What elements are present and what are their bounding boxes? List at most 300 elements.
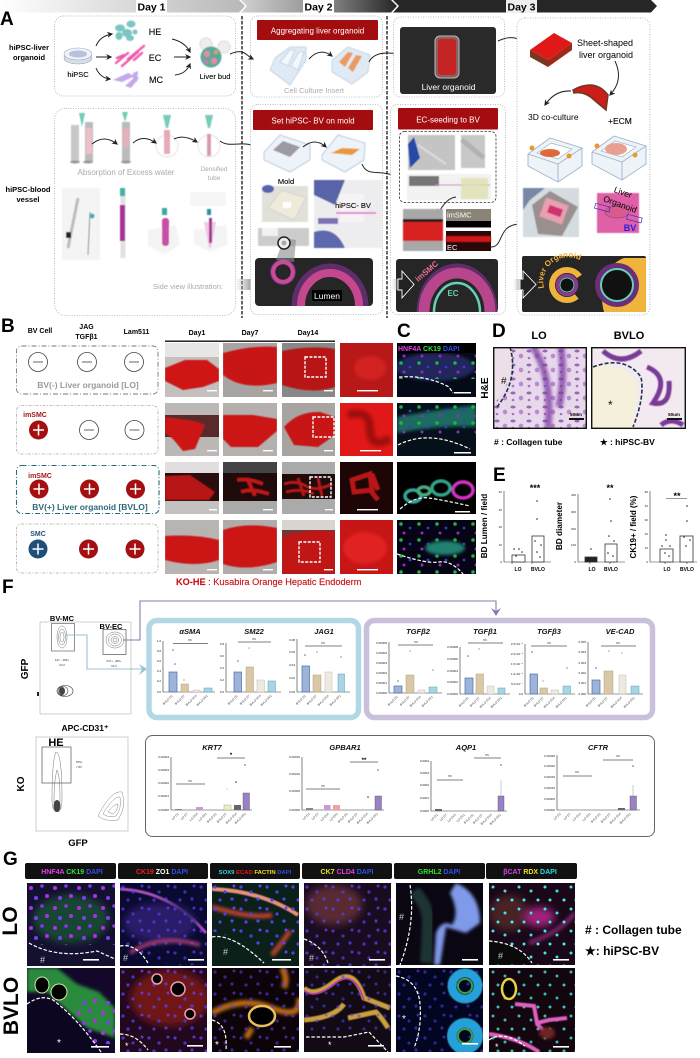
chart GPBAR1: LO D7 xyxy=(311,812,320,821)
column headers: TGFβ1 xyxy=(75,334,98,341)
LO H and E image: 50um xyxy=(570,412,582,417)
chart KRT7: ns xyxy=(188,779,192,783)
label mold: Mold xyxy=(278,177,294,186)
panel D xyxy=(480,321,686,447)
chart CFTR: 0.00000 xyxy=(544,808,555,812)
chart BD diameter xyxy=(555,483,625,573)
arrow to seeded photo xyxy=(438,197,456,214)
day timeline arrow: Day 1 xyxy=(137,2,166,14)
chart BD lumen: 0 xyxy=(500,560,502,564)
seeded tube photo xyxy=(403,209,443,251)
label 3D co-culture: 3D co-culture xyxy=(528,112,579,122)
chart KRT7: BVLO D7 xyxy=(216,812,228,824)
chart AQP1 xyxy=(420,743,507,826)
chart KRT7: LO D14 xyxy=(189,812,199,822)
image row 1: HNF4A CK19 DAPI xyxy=(398,346,460,353)
micrograph BVLO 4: * xyxy=(328,1040,332,1050)
chart AQP1: LO D7 xyxy=(439,813,448,822)
chart CK19 xyxy=(629,490,697,573)
photo imSMC day 1 xyxy=(165,403,219,456)
chart JAG1: BVLO D1 xyxy=(295,694,307,706)
LO H and E image: # xyxy=(501,376,507,387)
chart VE-CAD: BVLO D21 xyxy=(623,696,636,709)
chart VE-CAD xyxy=(578,627,643,709)
syringes diagram xyxy=(70,112,220,164)
chart GPBAR1: BVLO D7 xyxy=(347,812,359,824)
imSMC EC illustration xyxy=(396,259,498,312)
chart VE-CAD: ns xyxy=(616,641,620,645)
chart GPBAR1: 0.00010 xyxy=(289,772,300,776)
chart KRT7: LO D7 xyxy=(180,812,189,821)
box aggregating liver organoid xyxy=(230,16,398,97)
chart TGFb1: 0.00004 xyxy=(447,669,458,673)
chart aSMA: ns xyxy=(188,638,192,642)
stain header 3: SOX9 ECAD FACTIN DAPI xyxy=(219,870,292,876)
process arrows xyxy=(92,137,263,152)
arrow into coculture illustration xyxy=(512,271,536,298)
chart TGFb1: BVLO D7 xyxy=(469,696,481,708)
arrow between molds xyxy=(303,142,326,147)
liver organoid vessel illustration xyxy=(522,252,646,312)
chart AQP1: LO D14 xyxy=(447,813,457,823)
micrograph BVLO 1 xyxy=(27,968,115,1053)
chart aSMA: 0.0 xyxy=(157,690,161,694)
chart TGFb2: BVLO D7 xyxy=(399,695,411,707)
chart CFTR: 0.00020 xyxy=(544,764,555,768)
day timeline arrow: Day 3 xyxy=(507,2,536,14)
micrograph BVLO 2 xyxy=(120,968,207,1052)
chart VE-CAD: 0.003 xyxy=(578,661,586,665)
chart JAG1: 0.00 xyxy=(289,690,295,694)
chart SM22 xyxy=(220,627,281,707)
chart JAG1: 0.04 xyxy=(289,663,295,667)
legend collagen tube: # : Collagen tube xyxy=(494,437,563,447)
header BVLO: BVLO xyxy=(614,330,645,342)
label cell culture insert: Cell Culture Insert xyxy=(284,86,345,95)
chart TGFb3: BVLO D21 xyxy=(555,696,568,709)
coculture photo xyxy=(523,188,579,237)
chart TGFb3: 2.0×10⁻⁶ xyxy=(511,652,524,656)
chart CFTR: LO D21 xyxy=(582,812,592,822)
sheet-shaped organoid icon xyxy=(530,33,572,67)
imSMC EC illustration: imSMC xyxy=(414,259,440,284)
condition box LO: BV(-) Liver organoid [LO] xyxy=(37,380,139,390)
photo imSMC day 14 xyxy=(282,403,335,456)
red heading xyxy=(398,108,498,130)
chart CK19: LO xyxy=(664,567,671,573)
chart VE-CAD: BVLO D7 xyxy=(597,696,609,708)
condition box SMC xyxy=(16,524,158,573)
stain header 4 xyxy=(302,863,392,879)
flow plot BV: 20.0 xyxy=(59,663,65,667)
chart AQP1: ns xyxy=(485,753,489,757)
flow plot HE: HE xyxy=(48,737,64,749)
chart BD lumen: 20 xyxy=(499,525,502,529)
micrograph BVLO 3 xyxy=(212,968,299,1052)
chart AQP1: ns xyxy=(448,774,452,778)
legend collagen tube: # : Collagen tube xyxy=(585,923,682,937)
flow plot HE: 555+ xyxy=(76,760,83,764)
chart GPBAR1: BVLO D14 xyxy=(356,812,369,825)
photo LO zoom xyxy=(340,343,393,397)
column headers: BV Cell xyxy=(28,328,52,335)
chart BD diameter: 200 xyxy=(571,527,576,531)
chart BD lumen: 10 xyxy=(499,543,502,547)
chart BD diameter: BVLO xyxy=(604,567,618,573)
chart aSMA xyxy=(157,627,215,707)
chart CK19: 20 xyxy=(645,532,648,536)
flow plot axis labels: GFP xyxy=(20,658,31,679)
arrow to EC seeding xyxy=(362,164,403,182)
chart aSMA: BVLO D14 xyxy=(185,694,198,707)
arrow to coculture photo xyxy=(490,224,521,247)
stain header 1: HNF4A CK19 DAPI xyxy=(41,869,103,876)
flow plot BV: 647+, 488+ xyxy=(106,659,122,663)
photo BVLO day 14 xyxy=(282,462,335,514)
liver organoid day 1 box: MC xyxy=(149,75,163,85)
imSMC image xyxy=(446,209,491,228)
chart BD lumen: 40 xyxy=(499,490,502,494)
dark photo panel: Liver organoid xyxy=(422,82,476,92)
column headers: Day14 xyxy=(298,330,318,337)
stain header 3 xyxy=(210,863,300,879)
chart AQP1: LO D21 xyxy=(456,813,466,823)
flow plot BV xyxy=(37,614,131,714)
culture insert diagrams xyxy=(270,47,370,85)
mold diagrams xyxy=(264,135,365,172)
chart SM22: BVLO D14 xyxy=(249,694,262,707)
arrow into imSMC illustration xyxy=(390,271,414,298)
row label BVLO: BVLO xyxy=(0,977,23,1035)
chart BD lumen: 30 xyxy=(499,508,502,512)
curled organoid icon xyxy=(573,85,608,110)
chart AQP1: AQP1 xyxy=(455,743,476,752)
micrograph LO 3 xyxy=(212,883,299,966)
panel G xyxy=(0,849,682,1053)
chart GPBAR1: LO D14 xyxy=(320,812,330,822)
imSMC EC illustration: EC xyxy=(447,289,459,298)
stain header 2: CK19 ZO1 DAPI xyxy=(136,869,188,876)
flow plot BV: BV-EC xyxy=(100,622,123,631)
chart CFTR: ns xyxy=(575,770,579,774)
H and E liver organoid map: BV xyxy=(624,223,636,233)
chart TGFb1: 0.00006 xyxy=(447,657,458,661)
chart CFTR: BVLO D21 xyxy=(619,812,632,825)
chart VE-CAD: VE-CAD xyxy=(606,627,635,636)
chart KRT7: LO D21 xyxy=(198,812,208,822)
micrograph BVLO 1: * xyxy=(57,1038,61,1049)
row label: hiPSC-blood vessel: hiPSC-blood xyxy=(6,185,51,194)
chart TGFb3: 1.5×10⁻⁶ xyxy=(511,662,524,666)
chart CFTR: BVLO D7 xyxy=(600,812,612,824)
chart TGFb1: BVLO D1 xyxy=(458,696,470,708)
connector to purple box xyxy=(123,601,496,640)
dashed photo group xyxy=(400,132,496,202)
coculture dish right xyxy=(592,136,646,180)
chart GPBAR1: BVLO D1 xyxy=(337,812,349,824)
EC image xyxy=(446,231,491,252)
chart KRT7: 0.00002 xyxy=(158,781,169,785)
syringe photos xyxy=(62,188,228,260)
stain header 4: CK7 CLD4 DAPI xyxy=(321,869,374,876)
chart BD diameter: LO xyxy=(589,567,596,573)
blue arrowhead xyxy=(139,664,147,675)
day timeline arrow xyxy=(0,0,657,14)
chart CFTR: LO D14 xyxy=(572,812,582,822)
chart JAG1: ns xyxy=(321,641,325,645)
panel letter A: A xyxy=(0,9,14,30)
EC image: EC xyxy=(447,243,458,252)
panel A xyxy=(0,9,650,318)
blood vessel day 1 box xyxy=(54,108,272,316)
chart aSMA: 0.2 xyxy=(157,679,161,683)
stain header 1 xyxy=(25,863,116,879)
mold photos xyxy=(258,180,382,248)
chart CFTR xyxy=(544,743,640,825)
chart TGFb2 xyxy=(376,627,442,708)
chart JAG1: JAG1 xyxy=(314,627,334,636)
blue chart panel xyxy=(149,620,358,718)
photo imSMC zoom xyxy=(340,403,393,456)
column headers: Day1 xyxy=(189,330,205,337)
organoid photo grid xyxy=(165,343,393,574)
panel E xyxy=(480,465,697,573)
condition box SMC: SMC xyxy=(30,531,46,538)
row label: hiPSC-blood vessel: vessel xyxy=(17,195,39,204)
micrograph BVLO 6: * xyxy=(495,1042,499,1052)
chart GPBAR1: ** xyxy=(362,758,367,764)
chart BD diameter: 300 xyxy=(571,510,576,514)
box liver organoid photo xyxy=(394,17,525,97)
chart TGFb1: ns xyxy=(483,638,487,642)
image row 1 xyxy=(397,343,476,397)
photo LO day 1 xyxy=(165,343,219,397)
condition box BVLO xyxy=(16,466,159,514)
flow plot HE: 7.80 xyxy=(76,765,82,769)
chart GPBAR1 xyxy=(289,743,384,825)
label GFP: GFP xyxy=(68,838,88,849)
chart aSMA: BVLO D1 xyxy=(162,694,174,706)
icon: HE cells xyxy=(115,20,138,41)
stain header 6 xyxy=(486,863,577,879)
chart CK19: BVLO xyxy=(680,567,694,573)
chart AQP1: 0.0001 xyxy=(420,796,429,800)
BVLO H and E image: * xyxy=(608,398,613,412)
column headers: Day7 xyxy=(242,330,258,337)
chart CK19: 10 xyxy=(645,546,648,550)
micrograph LO 4: # xyxy=(309,953,314,963)
purple chart panel xyxy=(366,620,652,718)
icon: MC cells xyxy=(113,71,139,88)
photo LO day 7 xyxy=(223,343,277,397)
chart BD diameter: ** xyxy=(606,483,614,493)
day separator lines xyxy=(242,16,387,318)
chart KRT7: 0.00000 xyxy=(158,808,169,812)
chart CFTR: LO D1 xyxy=(553,812,562,821)
flow plot BV: BV-MC xyxy=(50,614,75,623)
stain header 5 xyxy=(394,863,485,879)
chart TGFb1: 0.00008 xyxy=(447,645,458,649)
chart KRT7: LO D1 xyxy=(171,812,180,821)
chart AQP1: BVLO D1 xyxy=(463,813,475,825)
box day 3 coculture xyxy=(514,18,650,316)
stain header 5: GRHL2 DAPI xyxy=(418,869,460,876)
red heading: Set hiPSC- BV on mold xyxy=(271,116,355,126)
chart SM22: 0.0 xyxy=(220,690,224,694)
box set hiPSC-BV on mold xyxy=(250,104,403,314)
chart CFTR: BVLO D1 xyxy=(590,812,602,824)
chart aSMA: 0.8 xyxy=(157,649,161,653)
chart KRT7: KRT7 xyxy=(202,743,223,752)
chart KRT7: BVLO D1 xyxy=(206,812,218,824)
chart JAG1: BVLO D7 xyxy=(306,694,318,706)
micrograph LO 6 xyxy=(489,883,575,965)
micrograph LO 6: # xyxy=(498,951,503,961)
chart AQP1: 0.0003 xyxy=(420,771,429,775)
chart JAG1: 0.02 xyxy=(289,676,295,680)
chart CFTR: LO D7 xyxy=(563,812,572,821)
label side view: Side view illustration: xyxy=(153,282,223,291)
chart KRT7: * xyxy=(230,753,233,759)
chart TGFb2: 0.00001 xyxy=(376,681,387,685)
icon: EC cells xyxy=(116,46,144,66)
chart TGFb1: BVLO D14 xyxy=(479,696,492,709)
chart SM22: 0.8 xyxy=(220,642,224,646)
label ECM: +ECM xyxy=(608,116,632,126)
icon: hiPSC dish xyxy=(64,48,92,64)
legend hiPSC-BV: ★ : hiPSC-BV xyxy=(600,437,655,447)
chart BD diameter: 400 xyxy=(571,493,576,497)
chart TGFb1 xyxy=(447,627,510,709)
photo BVLO day 1 xyxy=(165,462,219,514)
label KO-HE: KO-HE : Kusabira Orange Hepatic Endoderm xyxy=(176,577,362,587)
chart SM22: BVLO D21 xyxy=(260,694,273,707)
label hiPSC: hiPSC xyxy=(67,70,89,79)
chart TGFb3: 0.0 xyxy=(519,692,523,696)
chart aSMA: 1.0 xyxy=(157,639,161,643)
flow plot BV: 647-, 488+ xyxy=(55,658,69,662)
chart TGFb2: 0.00000 xyxy=(376,691,387,695)
H and E liver organoid map: Organoid xyxy=(602,194,638,215)
chart TGFb2: BVLO D14 xyxy=(409,695,422,708)
chart GPBAR1: BVLO D21 xyxy=(366,812,379,825)
chart TGFb3: TGFβ3 xyxy=(537,627,562,636)
micrograph BVLO 2: * xyxy=(125,1041,129,1051)
label absorption: Absorption of Excess water xyxy=(78,168,175,177)
micrograph LO 2 xyxy=(120,883,207,966)
legend hiPSC-BV: ★: hiPSC-BV xyxy=(585,944,659,958)
chart JAG1 xyxy=(289,627,350,707)
chart CFTR: 0.00005 xyxy=(544,797,555,801)
chart BD diameter: BD diameter xyxy=(555,501,564,550)
chart TGFb2: 0.00002 xyxy=(376,671,387,675)
chart TGFb1: TGFβ1 xyxy=(473,627,497,636)
chart KRT7: 0.00003 xyxy=(158,768,169,772)
chart AQP1: BVLO D21 xyxy=(489,813,502,826)
box EC seeding xyxy=(390,104,521,314)
panel letter B: B xyxy=(1,316,15,337)
BVLO H and E image xyxy=(591,347,686,429)
micrograph LO 4 xyxy=(304,883,391,966)
chart SM22: BVLO D1 xyxy=(227,694,239,706)
row label: hiPSC-liver organoid: hiPSC-liver xyxy=(9,43,49,52)
micrograph BVLO 3: * xyxy=(215,1040,219,1051)
label densified tube: tube xyxy=(208,175,221,182)
chart GPBAR1: 0.00015 xyxy=(289,755,300,759)
chart VE-CAD: BVLO D14 xyxy=(610,696,623,709)
arrows in insert box xyxy=(230,52,398,62)
H and E liver organoid map: Liver xyxy=(613,184,634,200)
chart BD lumen: LO xyxy=(515,567,522,573)
label KO: KO xyxy=(16,776,27,792)
flow x label: APC-CD31⁺ xyxy=(62,723,109,733)
micrograph BVLO 5: * xyxy=(402,1014,406,1025)
chart SM22: SM22 xyxy=(244,627,265,636)
connector to blue box xyxy=(65,635,143,669)
chart CFTR: 0.00010 xyxy=(544,786,555,790)
row label: hiPSC-liver organoid: organoid xyxy=(13,53,45,62)
red heading xyxy=(253,110,373,130)
chart BD lumen: BD Lumen / field xyxy=(480,494,489,558)
flow plot HE xyxy=(36,737,128,831)
chart TGFb2: BVLO D21 xyxy=(421,695,434,708)
lumen illustration: Lumen xyxy=(314,291,340,301)
chart TGFb3: 2.5×10⁻⁶ xyxy=(511,642,524,646)
label hiPSC-BV: hiPSC- BV xyxy=(335,201,371,210)
chart TGFb3 xyxy=(511,627,575,709)
chart GPBAR1: GPBAR1 xyxy=(329,743,361,752)
chart aSMA: αSMA xyxy=(179,627,201,636)
chart VE-CAD: 0.000 xyxy=(578,692,586,696)
liver organoid day 1 box xyxy=(54,16,236,96)
chart SM22: 0.6 xyxy=(220,654,224,658)
chart aSMA: 0.4 xyxy=(157,669,161,673)
chart KRT7: BVLO D14 xyxy=(225,812,238,825)
chart JAG1: BVLO D21 xyxy=(329,694,342,707)
condition box LO xyxy=(16,346,158,394)
chart BD lumen: BVLO xyxy=(531,567,545,573)
chart BD diameter: 100 xyxy=(571,543,576,547)
BVLO H and E image: 50um xyxy=(668,412,680,417)
panel letter C: C xyxy=(397,321,411,342)
micrograph LO 5: # xyxy=(399,912,404,922)
stain header 6: βCAT RDX DAPI xyxy=(503,869,557,876)
chart aSMA: BVLO D21 xyxy=(196,694,209,707)
micrograph BVLO 4 xyxy=(304,968,391,1052)
image row 4 xyxy=(397,520,476,574)
chart KRT7: 0.00004 xyxy=(158,755,169,759)
chart JAG1: 0.06 xyxy=(289,650,295,654)
chart TGFb2: 0.00003 xyxy=(376,661,387,665)
panel F xyxy=(2,577,654,849)
chart CK19: 30 xyxy=(645,518,648,522)
H and E liver organoid map xyxy=(594,184,642,233)
label densified tube: Densified xyxy=(200,166,228,173)
micrograph LO 1 xyxy=(27,883,115,966)
stain header 2 xyxy=(118,863,208,879)
micrograph BVLO 6 xyxy=(489,968,575,1052)
chart KRT7: 0.00001 xyxy=(158,794,169,798)
chart TGFb3: BVLO D1 xyxy=(523,696,535,708)
chart aSMA: 0.6 xyxy=(157,659,161,663)
chart GPBAR1: 0.00005 xyxy=(289,789,300,793)
photo BVLO day 7 xyxy=(223,462,277,514)
chart CK19: 40 xyxy=(645,504,648,508)
chart TGFb3: BVLO D7 xyxy=(533,696,545,708)
red heading: Aggregating liver organoid xyxy=(271,26,364,36)
photo SMC day 14 xyxy=(282,520,335,574)
condition box BVLO: BV(+) Liver organoid [BVLO] xyxy=(32,502,148,512)
